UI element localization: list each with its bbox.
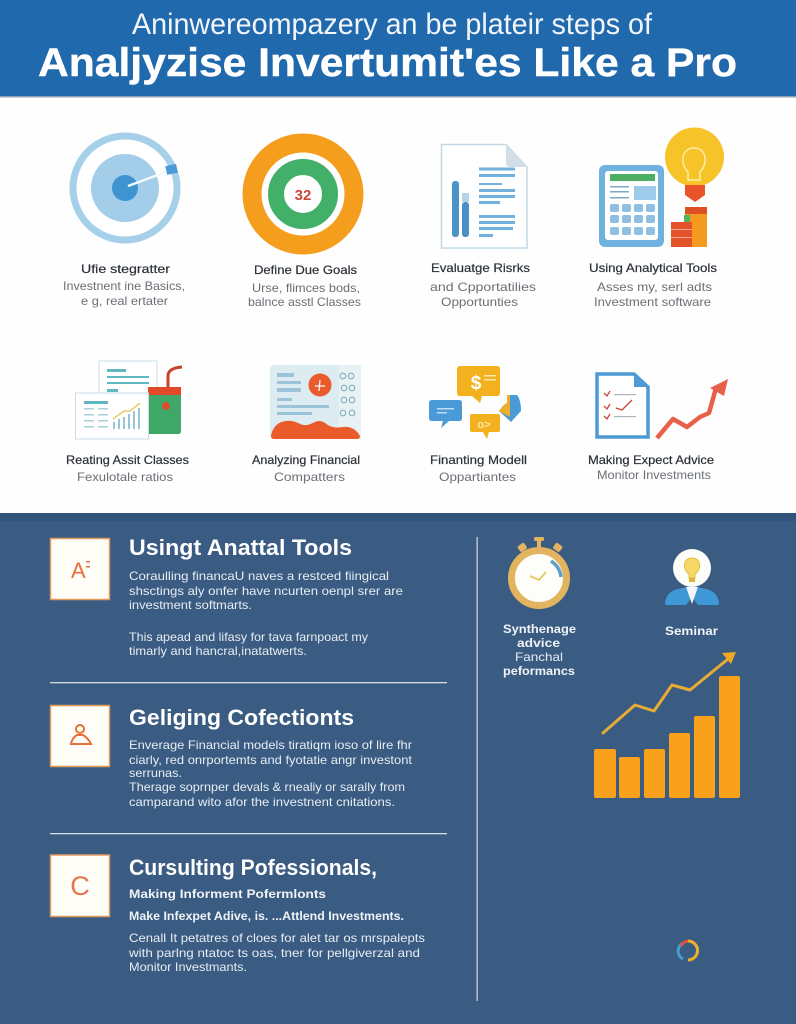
section: analytical tools text: Usingt Anattal Tools	[129, 535, 352, 560]
step: analyzing financials caption: Compatters	[274, 470, 345, 484]
step: goals caption: Define Due Goals	[254, 263, 357, 277]
section: analytical tools text	[129, 535, 403, 658]
badge: analytical tools: A	[71, 558, 86, 583]
section: connections text: ciarly, red onrportemts and fyotatie angr investont	[129, 753, 413, 767]
section: consulting professionals text: Cenall It petatres of cloes for alet tar os mrspalepts	[129, 931, 425, 945]
icon: small ring logo	[678, 941, 698, 960]
step: analytical tools caption	[589, 261, 717, 309]
step: strategy caption: Investnent ine Basics,	[63, 279, 185, 293]
section: consulting professionals text: Make Infexpet Adive, is. ...Attlend Investments.	[129, 909, 404, 923]
stopwatch caption	[503, 622, 576, 678]
badge: letter C: C	[70, 871, 90, 901]
step: strategy caption: Ufie stegratter	[81, 262, 170, 276]
section: consulting professionals text: Cursulting Pofessionals,	[129, 855, 377, 880]
dark detail panel	[0, 513, 796, 1024]
seminar caption: Seminar	[665, 624, 718, 638]
section: consulting professionals text: Making Informent Pofermlonts	[129, 887, 326, 901]
stopwatch caption: peformancs	[503, 664, 575, 678]
main title: Analjyzise Invertumit'es Like a Pro	[38, 41, 737, 85]
step: expert advice caption: Monitor Investments	[597, 468, 711, 482]
section: analytical tools text: timarly and hancral,inatatwerts.	[129, 644, 307, 658]
stopwatch caption: Fanchal	[515, 650, 563, 664]
step: strategy caption: e g, real ertater	[81, 294, 168, 308]
icon: advisor with bulb	[665, 549, 719, 605]
icon: goal dial: 32	[295, 187, 311, 204]
icon: speech bubbles	[429, 366, 521, 439]
section: analytical tools text: This apead and lifasy for tava farnpoact my	[129, 630, 368, 644]
step: expert advice caption: Making Expect Advice	[588, 453, 714, 467]
step: financing models caption	[430, 453, 527, 484]
section: connections text: Enverage Financial models tiratiqm ioso of lire fhr	[129, 738, 412, 752]
section: analytical tools text: investment softmarts.	[129, 598, 252, 612]
step: risks caption: and Cpportatilies	[430, 280, 536, 294]
section: connections text: Therage soprnper devals & rnealiy or sarally from	[129, 780, 405, 794]
step: risks caption	[430, 261, 536, 309]
step: asset classes caption	[66, 453, 189, 484]
icon: document with bars	[442, 144, 527, 248]
section: analytical tools text: Coraulling financaU naves a restced fiingical	[129, 569, 389, 583]
title line one: Aninwereompazery an be plateir steps of	[132, 8, 653, 41]
icon: speech bubbles: o>	[477, 419, 491, 431]
icon: reports and bag	[76, 361, 182, 439]
step: asset classes caption: Fexulotale ratios	[77, 470, 173, 484]
section: analytical tools text: shsctings aly onfer have ncurten oenpl srer are	[129, 584, 403, 598]
step: goals caption: Urse, flimces bods,	[252, 281, 360, 295]
step: goals caption: balnce asstl Classes	[248, 295, 361, 309]
step: financing models caption: Oppartiantes	[439, 470, 516, 484]
section: connections text: camparand wito afor the investnent cnitations.	[129, 795, 395, 809]
section: connections text	[129, 705, 413, 809]
section: consulting professionals text: Monitor Investmants.	[129, 960, 247, 974]
icon: goal dial	[252, 143, 354, 245]
step: financing models caption: Finanting Modell	[430, 453, 527, 467]
badge: person	[50, 706, 110, 766]
section: connections text: serrunas.	[129, 766, 182, 780]
step: strategy caption	[63, 262, 185, 308]
icon: calculator and light bulb	[599, 128, 724, 247]
badge: letter C	[50, 855, 110, 916]
step: analyzing financials caption	[252, 453, 360, 484]
step: goals caption	[248, 263, 361, 309]
section: connections text: Geliging Cofectionts	[129, 705, 354, 730]
badge: analytical tools	[50, 538, 110, 600]
step: expert advice caption	[588, 453, 714, 482]
icon: checklist and rising arrow	[597, 374, 728, 438]
step: risks caption: Opportunties	[441, 295, 518, 309]
icon: stopwatch	[512, 537, 566, 606]
stopwatch caption: advice	[517, 636, 560, 650]
step: analytical tools caption: Asses my, serl adts	[597, 280, 712, 294]
section: consulting professionals text	[128, 855, 425, 974]
step: asset classes caption: Reating Assit Classes	[66, 453, 189, 467]
step: analytical tools caption: Investment software	[594, 295, 711, 309]
step: analytical tools caption: Using Analytical Tools	[589, 261, 717, 275]
icon: speech bubbles: $	[471, 373, 482, 394]
icon: target	[73, 136, 178, 240]
section: consulting professionals text: with parlng ntatoc ts oas, tner for pellgiverzal and	[128, 946, 420, 960]
step: risks caption: Evaluatge Risrks	[431, 261, 530, 275]
icon: financial dashboard	[270, 365, 361, 439]
stopwatch caption: Synthenage	[503, 622, 576, 636]
header banner	[0, 0, 796, 98]
step: analyzing financials caption: Analyzing Financial	[252, 453, 360, 467]
bar chart with trend arrow	[594, 652, 740, 798]
